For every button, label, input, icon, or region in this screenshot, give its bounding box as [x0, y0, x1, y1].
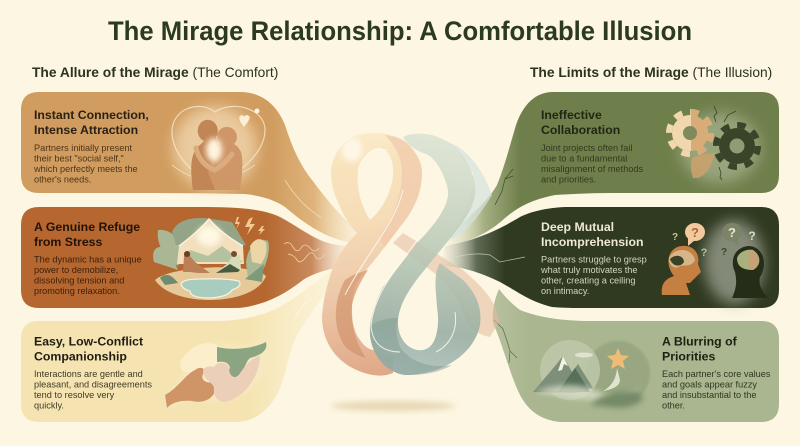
center shadow — [331, 401, 455, 411]
text: genuine refuge: from Stress — [34, 235, 103, 249]
text: ineffective collaboration — [541, 108, 644, 184]
icon: two heads: ? — [748, 229, 756, 243]
text: blurring of priorities: other. — [662, 400, 685, 410]
text: deep mutual incomprehension: what truly motivates the — [540, 265, 638, 275]
panel: instant connection — [21, 92, 358, 243]
text: blurring of priorities — [662, 334, 771, 410]
title: The Mirage Relationship: A Comfortable Illusion — [108, 16, 692, 46]
green ribbon — [370, 134, 480, 375]
icon: mismatched gears — [669, 106, 760, 183]
text: easy companionship: Easy, Low-Conflict — [34, 334, 143, 348]
text: blurring of priorities: Priorities — [662, 350, 715, 364]
warm inner shade — [336, 270, 368, 358]
panel: blurring of priorities — [493, 289, 779, 422]
lightning bolts — [235, 217, 255, 235]
text: blurring of priorities: and insubstantial to the — [662, 390, 756, 400]
icon: small heart — [239, 115, 250, 127]
speech bubble right: ? — [728, 225, 736, 240]
speech bubble left: ? — [691, 225, 699, 240]
text: easy companionship: pleasant, and disagreements — [34, 380, 152, 390]
text: deep mutual incomprehension: Deep Mutual — [541, 220, 614, 234]
text: deep mutual incomprehension: Partners struggle to gresp — [541, 254, 647, 264]
text: instant connection: Instant Connection, — [34, 108, 149, 122]
panel: ineffective collaboration — [446, 92, 779, 246]
text: genuine refuge — [34, 220, 142, 296]
text: easy companionship: tend to resolve very — [34, 390, 115, 400]
text: genuine refuge: The dynamic has a unique — [34, 254, 142, 264]
ribbon highlights — [345, 150, 456, 352]
icon: tent oasis — [153, 217, 269, 300]
icon: two heads — [662, 220, 768, 304]
text: blurring of priorities: A Blurring of — [662, 334, 738, 348]
text: deep mutual incomprehension: other, creating a ceiling — [541, 276, 636, 286]
panel: genuine refuge — [21, 207, 352, 308]
text: easy companionship: Interactions are gentle and — [34, 369, 143, 379]
translucent iridescent outer band — [450, 143, 492, 240]
text: ineffective collaboration: misalignment of methods — [541, 164, 644, 174]
icon: two heads: ? — [672, 232, 678, 243]
text: instant connection: other's needs. — [34, 174, 91, 184]
text: easy companionship: quickly. — [34, 400, 64, 410]
heading: limits column: The Limits of the Mirage (The Illusion) — [530, 65, 772, 80]
text: instant connection: Intense Attraction — [34, 123, 138, 137]
panel: easy companionship — [21, 272, 336, 422]
text: instant connection: which perfectly meets the — [33, 164, 138, 174]
warm transparent lower tail — [393, 233, 499, 337]
text: ineffective collaboration: Collaboration — [541, 123, 620, 137]
pond — [181, 279, 240, 298]
icon: two heads: ? — [701, 247, 708, 259]
text: easy companionship — [34, 334, 152, 410]
text: deep mutual incomprehension — [540, 220, 647, 296]
text: genuine refuge: dissolving tension and — [34, 276, 124, 286]
text: blurring of priorities: Each partner's core values — [662, 369, 771, 379]
text: easy companionship: Companionship — [34, 350, 127, 364]
text: genuine refuge: promoting relaxation. — [34, 286, 120, 296]
text: instant connection — [33, 108, 149, 184]
text: deep mutual incomprehension: on intimacy. — [541, 286, 589, 296]
people — [183, 251, 210, 273]
text: instant connection: their best "social self," — [34, 154, 124, 164]
green lower shade — [370, 318, 452, 375]
icon: two heads: ? — [721, 247, 727, 258]
warm peach shade — [381, 135, 422, 247]
text: blurring of priorities: and goals appear fuzzy — [662, 380, 757, 390]
warm ribbon — [322, 133, 422, 376]
heading: allure column: The Allure of the Mirage (The Comfort) — [32, 65, 278, 80]
icon: embracing couple — [172, 106, 265, 190]
text: ineffective collaboration: due to a fundamental — [541, 154, 627, 164]
text: ineffective collaboration: and priorities. — [541, 174, 596, 184]
icon: puzzle waves — [165, 340, 269, 408]
text: genuine refuge: power to demobilize, — [34, 265, 118, 275]
text: genuine refuge: A Genuine Refuge — [34, 220, 140, 234]
text: ineffective collaboration: Joint projects often fail — [541, 143, 632, 153]
infinity ribbon — [322, 133, 499, 376]
text: instant connection: Partners initially present — [34, 143, 132, 153]
icon: hazy mountain and star — [533, 340, 650, 408]
text: deep mutual incomprehension: Incomprehension — [541, 235, 644, 249]
text: ineffective collaboration: Ineffective — [541, 108, 602, 122]
panel: deep mutual incomprehension — [441, 207, 779, 308]
